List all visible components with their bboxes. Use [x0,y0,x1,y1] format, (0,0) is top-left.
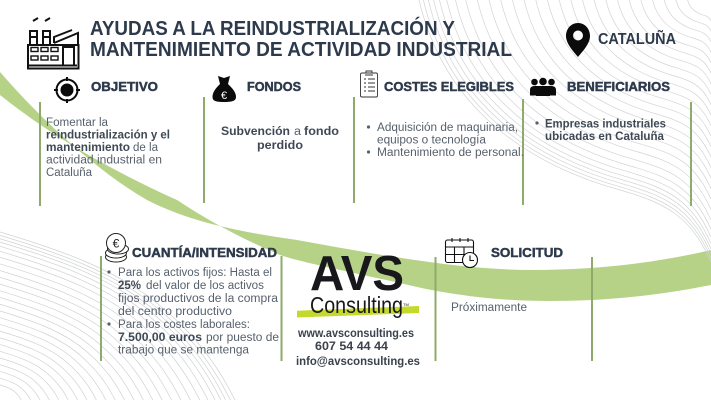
location label: Cataluña: CATALUÑA [598,30,676,48]
contact details: 607 54 44 44 [315,341,389,353]
logo: AVS Consulting: AVS [310,247,404,301]
text: cuantía/intensidad: fijos productivos de la compra [118,293,279,305]
panel: solicitud [446,238,563,314]
text: objetivo: actividad industrial en [46,154,162,166]
panel: cuantía/intensidad [106,234,279,356]
text: beneficiarios [535,118,666,143]
text: costes elegibles: equipos o tecnología [377,134,487,146]
text: fondos: Subvención [221,126,290,138]
text: objetivo: reindustrialización y el [46,130,170,142]
text: cuantía/intensidad: 7.500,00 euros [118,332,202,344]
green swoosh band [0,72,711,301]
text: solicitud: Próximamente [451,302,527,314]
text: cuantía/intensidad: Para los costes laborales: [118,319,250,331]
icon: money bag: € [221,90,227,102]
text: beneficiarios: ubicadas en Cataluña [545,131,665,143]
text: objetivo [46,117,170,179]
text: beneficiarios: Empresas industriales [545,118,666,130]
panel: costes elegibles [360,71,524,159]
panel: objetivo [46,77,170,179]
title: MANTENIMIENTO DE ACTIVIDAD INDUSTRIAL [90,39,512,61]
text: costes elegibles [367,122,524,159]
text: cuantía/intensidad [107,267,279,356]
icon: calendar with clock [446,238,478,268]
heading: cuantía/intensidad: CUANTÍA/INTENSIDAD [132,245,277,260]
text: cuantía/intensidad: del valor de los activos [146,280,264,292]
text: cuantía/intensidad: 25% [118,280,141,292]
title [90,16,512,61]
icon: location pin [566,23,590,57]
logo: AVS Consulting [297,247,419,318]
icon: coins: € [113,236,120,250]
text: cuantía/intensidad: del centro productivo [118,306,232,318]
text: fondos: perdido [257,140,303,152]
text: costes elegibles: Mantenimiento de personal. [377,147,524,159]
text: objetivo: mantenimiento [46,142,130,154]
icon: clipboard [360,71,378,97]
heading: objetivo: OBJETIVO [91,80,158,94]
text: costes elegibles: Adquisición de maquinaria, [377,122,518,134]
heading: fondos: FONDOS [247,80,301,94]
title: AYUDAS A LA REINDUSTRIALIZACIÓN Y [90,16,456,40]
contact details [296,328,420,368]
panel: fondos [212,76,339,152]
text: objetivo: Cataluña [46,167,93,179]
icon: factory [28,18,78,68]
logo: AVS Consulting: Consulting [310,292,403,318]
icon: target [54,77,80,103]
heading: beneficiarios: BENEFICIARIOS [567,80,670,94]
text: fondos [221,126,339,152]
logo: AVS Consulting: TM [403,302,409,307]
icon: people [530,78,556,96]
text: cuantía/intensidad: Para los activos fijos: Hasta el [118,267,272,279]
contact details: info@avsconsulting.es [296,356,420,368]
text: objetivo: de la [133,142,159,154]
contact details: www.avsconsulting.es [297,328,414,340]
text: objetivo: Fomentar la [46,117,109,129]
line pattern: bottom left [0,232,235,400]
text: cuantía/intensidad: trabajo que se mantenga [118,344,250,356]
line pattern: top right [419,0,711,262]
heading: solicitud: SOLICITUD [491,246,563,260]
panel: beneficiarios [530,78,670,143]
text: fondos: a [294,126,302,138]
text: fondos: fondo [304,126,339,138]
text: cuantía/intensidad: por puesto de [206,332,279,344]
icon: coins [106,234,128,262]
column rules [39,97,692,361]
heading: costes elegibles: COSTES ELEGIBLES [384,80,514,94]
